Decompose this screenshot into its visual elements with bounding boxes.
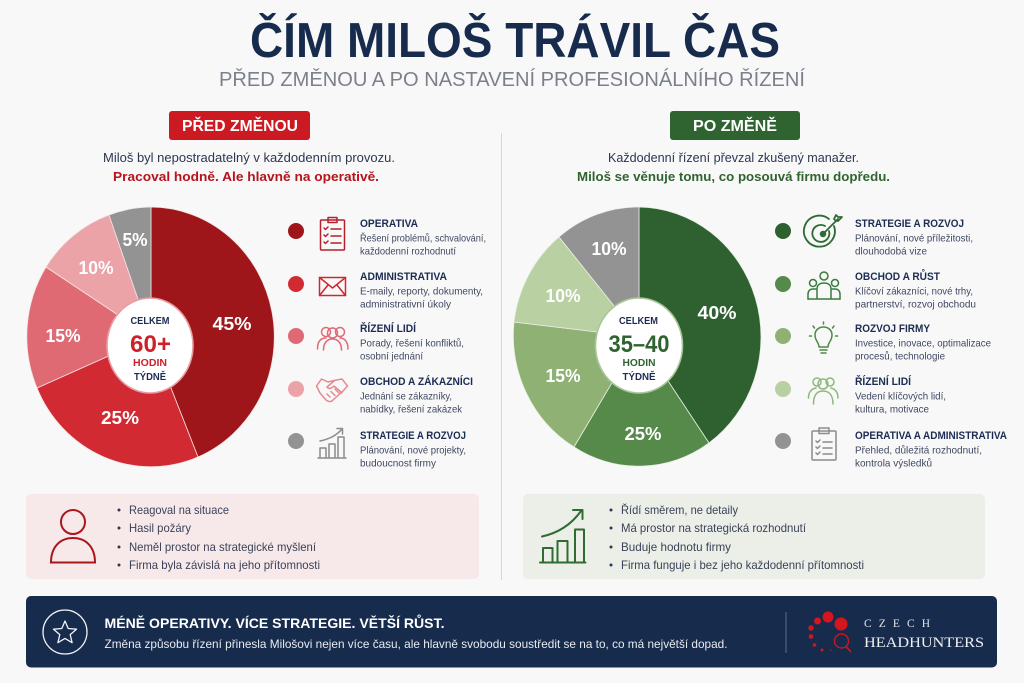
legend item: řízení lidí: osobní jednání <box>360 350 423 362</box>
bullet list: po změně: Buduje hodnotu firmy <box>621 540 731 554</box>
legend item: obchod a růst: partnerství, rozvoj obchodu <box>855 298 976 310</box>
legend item: administrativa: E-maily, reporty, dokumenty, <box>360 286 483 298</box>
pie chart: po změně: 15% <box>546 366 580 386</box>
pie chart: před změnou: 15% <box>46 326 80 346</box>
intro text: po změně: Miloš se věnuje tomu, co posouvá firmu dopředu. <box>577 169 890 184</box>
intro text: po změně: Každodenní řízení převzal zkušený manažer. <box>608 151 859 165</box>
badge: po změně <box>670 111 800 140</box>
pie centre: celkem 60+: 60+ <box>130 331 171 358</box>
legend item: řízení lidí: Vedení klíčových lidí, <box>855 390 946 402</box>
legend item: řízení lidí: ŘÍZENÍ LIDÍ <box>855 375 912 388</box>
footer banner <box>26 596 997 668</box>
legend item: strategie a rozvoj <box>288 428 466 470</box>
legend item: operativa a administrativa: OPERATIVA A ADMINISTRATIVA <box>855 430 1007 442</box>
badge: před změnou <box>169 111 310 140</box>
legend item: řízení lidí <box>775 375 946 416</box>
bullet list: před změnou: Firma byla závislá na jeho přítomnosti <box>129 558 320 572</box>
legend item: operativa: OPERATIVA <box>360 218 418 230</box>
legend item: obchod a zákazníci: nabídky, řešení zakázek <box>360 404 463 416</box>
badge: po změně: PO ZMĚNĚ <box>693 116 777 135</box>
icon: star in circle <box>43 610 87 654</box>
legend item: strategie a rozvoj: Plánování, nové projekty, <box>360 444 466 456</box>
intro text: před změnou: Miloš byl nepostradatelný v každodenním provozu. <box>103 151 395 165</box>
bullet list: před změnou: Hasil požáry <box>129 521 191 535</box>
legend item: rozvoj firmy: procesů, technologie <box>855 350 945 362</box>
legend item: strategie a rozvoj: budoucnost firmy <box>360 458 437 470</box>
pie centre: celkem 60+: CELKEM <box>130 315 170 327</box>
legend item: strategie a rozvoj: dlouhodobá vize <box>855 246 927 258</box>
pie chart: před změnou: 5% <box>122 230 148 250</box>
logo: Czech Headhunters: HEADHUNTERS <box>864 635 984 651</box>
legend item: operativa <box>288 218 486 258</box>
bullet list: po změně <box>610 502 864 572</box>
pie chart: před změnou <box>27 207 274 467</box>
bullet list: po změně: Má prostor na strategická rozhodnutí <box>621 521 807 535</box>
footer text: Změna způsobu řízení přinesla Milošovi nejen více času, ale hlavně svobodu soustředit se na to, co má největší dopad. <box>104 637 728 651</box>
logo: Czech Headhunters <box>808 612 984 652</box>
panel: shrnutí po změně <box>523 494 985 579</box>
legend item: administrativa: administrativní úkoly <box>360 298 452 310</box>
legend item: strategie a rozvoj <box>775 215 973 258</box>
legend item: řízení lidí: kultura, motivace <box>855 404 929 416</box>
legend: před změnou <box>288 218 486 470</box>
icon: growth chart <box>540 510 586 562</box>
subtitle: PŘED ZMĚNOU A PO NASTAVENÍ PROFESIONÁLNÍHO ŘÍZENÍ <box>219 68 805 91</box>
legend item: administrativa: ADMINISTRATIVA <box>360 271 447 283</box>
legend item: obchod a růst: Klíčoví zákazníci, nové trhy, <box>855 286 973 298</box>
pie chart: před změnou: 25% <box>101 408 139 428</box>
legend item: řízení lidí: Porady, řešení konfliktů, <box>360 338 464 350</box>
bullet list: před změnou: Neměl prostor na strategické myšlení <box>129 540 317 554</box>
bullet list: před změnou: Reagoval na situace <box>129 503 229 517</box>
legend item: rozvoj firmy: ROZVOJ FIRMY <box>855 323 931 335</box>
legend item: operativa a administrativa: Přehled, důležitá rozhodnutí, <box>855 444 982 456</box>
legend item: obchod a růst: OBCHOD A RŮST <box>855 269 940 283</box>
pie chart: před změnou: 45% <box>212 314 252 334</box>
pie chart: před změnou: 10% <box>78 258 114 278</box>
legend: po změně <box>775 215 1007 470</box>
bullet list: po změně: Firma funguje i bez jeho každodenní přítomnosti <box>621 558 864 572</box>
panel: shrnutí před změnou <box>26 494 479 579</box>
legend item: administrativa <box>288 271 483 310</box>
pie centre: celkem 60+: HODIN <box>133 357 167 369</box>
intro text: před změnou: Pracoval hodně. Ale hlavně na operativě. <box>113 169 379 184</box>
badge: před změnou: PŘED ZMĚNOU <box>182 116 298 135</box>
intro text: po změně <box>577 151 890 184</box>
pie centre: celkem 35–40 <box>596 298 682 393</box>
legend item: strategie a rozvoj: Plánování, nové příležitosti, <box>855 232 973 244</box>
pie chart: po změně: 25% <box>624 424 662 444</box>
legend item: operativa: každodenní rozhodnutí <box>360 246 456 258</box>
legend item: obchod a zákazníci <box>288 375 473 416</box>
intro text: před změnou <box>103 151 395 184</box>
title: ČÍM MILOŠ TRÁVIL ČAS <box>250 13 780 68</box>
legend item: obchod a růst <box>775 269 976 310</box>
legend item: operativa a administrativa: kontrola výsledků <box>855 458 932 470</box>
legend item: rozvoj firmy: Investice, inovace, optimalizace <box>855 338 991 350</box>
pie centre: celkem 35–40: HODIN <box>622 357 656 369</box>
legend item: obchod a zákazníci: OBCHOD A ZÁKAZNÍCI <box>360 375 473 388</box>
legend item: strategie a rozvoj: STRATEGIE A ROZVOJ <box>855 218 964 230</box>
footer heading: MÉNĚ OPERATIVY. VÍCE STRATEGIE. VĚTŠÍ RŮST. <box>104 613 444 631</box>
legend item: rozvoj firmy <box>775 322 991 362</box>
icon: person <box>51 510 95 562</box>
pie centre: celkem 35–40: CELKEM <box>619 315 658 327</box>
pie chart: po změně: 40% <box>698 303 736 323</box>
pie centre: celkem 35–40: 35–40 <box>608 331 670 358</box>
bullet list: před změnou <box>118 503 320 572</box>
logo: Czech Headhunters: CZECH <box>864 618 930 630</box>
legend item: řízení lidí <box>288 322 464 362</box>
legend item: operativa: Řešení problémů, schvalování, <box>360 232 486 244</box>
pie chart: po změně: 10% <box>592 239 626 259</box>
legend item: řízení lidí: ŘÍZENÍ LIDÍ <box>360 322 417 335</box>
pie chart: po změně <box>513 207 761 466</box>
bullet list: po změně: Řídí směrem, ne detaily <box>621 502 738 517</box>
legend item: obchod a zákazníci: Jednání se zákazníky, <box>360 390 452 402</box>
legend item: operativa a administrativa <box>775 428 1007 470</box>
pie centre: celkem 60+: TÝDNĚ <box>134 370 166 383</box>
pie chart: po změně: 10% <box>546 286 580 306</box>
pie centre: celkem 60+ <box>107 298 193 393</box>
legend item: strategie a rozvoj: STRATEGIE A ROZVOJ <box>360 430 466 442</box>
pie centre: celkem 35–40: TÝDNĚ <box>622 370 656 383</box>
